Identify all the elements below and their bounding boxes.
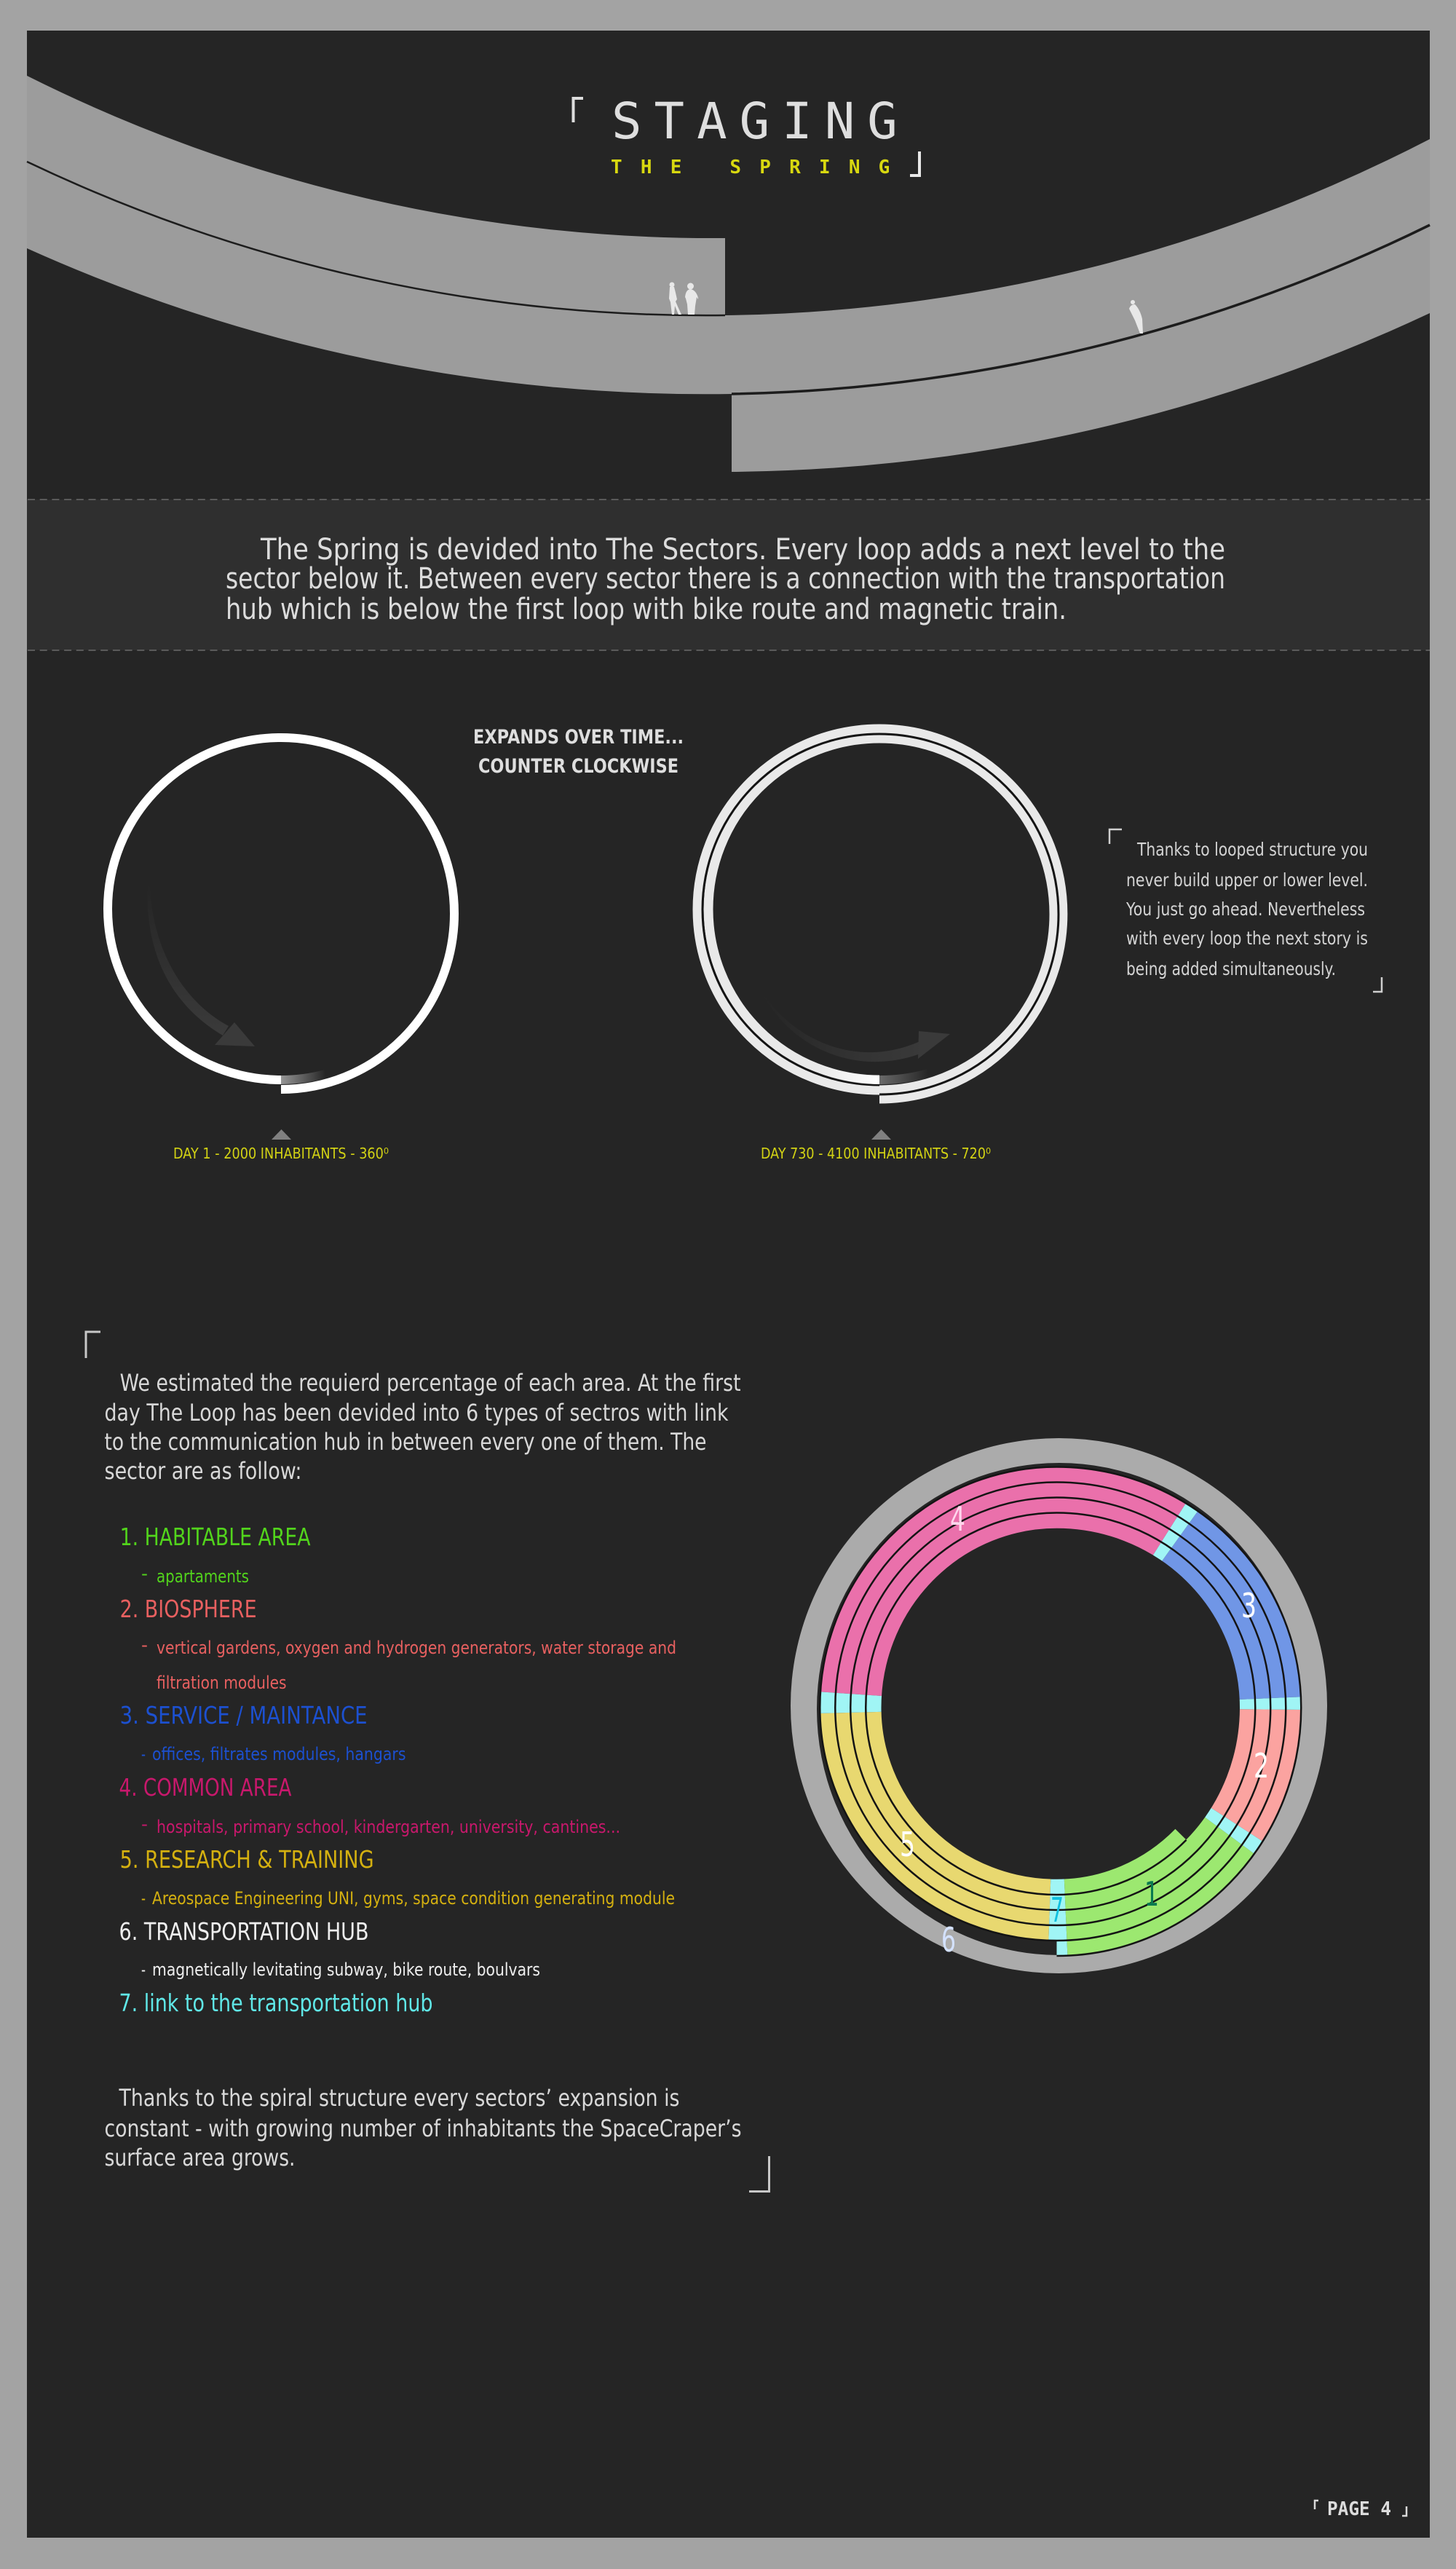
legend: biosphere: - bbox=[141, 1635, 148, 1655]
faded loop continuation bbox=[879, 1073, 928, 1080]
legend: service: - bbox=[141, 1744, 146, 1764]
legend: transportation hub: 6. TRANSPORTATION HUB bbox=[119, 1917, 368, 1946]
bracket open bbox=[1315, 2501, 1318, 2509]
expands over time heading: COUNTER CLOCKWISE bbox=[478, 755, 678, 778]
intro paragraph: day The Loop has been devided into 6 types of sectros with link bbox=[105, 1399, 729, 1426]
bracket close bbox=[749, 2156, 769, 2192]
loop separators bbox=[820, 1467, 1301, 1956]
sector description text bbox=[86, 1332, 769, 2192]
sector: common area bbox=[821, 1468, 1185, 1696]
callout text: with every loop the next story is bbox=[1126, 928, 1368, 949]
icon: walking person bbox=[1129, 300, 1143, 334]
title bracket close bbox=[910, 151, 919, 175]
number labels: 1 bbox=[1144, 1874, 1159, 1914]
legend: transportation hub: - bbox=[141, 1960, 146, 1980]
legend: habitable area bbox=[120, 1523, 311, 1587]
floor line left bbox=[27, 162, 725, 315]
legend: research and training: 5. RESEARCH & TRAINING bbox=[120, 1845, 374, 1874]
legend: service: 3. SERVICE / MAINTANCE bbox=[120, 1701, 368, 1729]
direction arrow bbox=[761, 990, 950, 1062]
upper ramp band bbox=[27, 76, 725, 315]
diagram: day 1 loop bbox=[108, 738, 454, 1089]
expands over time heading: EXPANDS OVER TIME... bbox=[473, 726, 684, 749]
marker triangle day 730 bbox=[871, 1129, 891, 1140]
legend: common area bbox=[119, 1773, 620, 1837]
spiral ramp illustration bbox=[27, 76, 1430, 472]
legend: habitable area: apartaments bbox=[157, 1566, 249, 1587]
label day 1: DAY 1 - 2000 INHABITANTS - 360⁰ bbox=[173, 1145, 389, 1162]
number labels: 5 bbox=[900, 1825, 915, 1864]
intro paragraph: We estimated the requierd percentage of each area. At the first bbox=[120, 1369, 741, 1397]
intro paragraph: sector are as follow: bbox=[105, 1457, 301, 1485]
callout text bbox=[1125, 839, 1368, 979]
marker triangle day 1 bbox=[272, 1129, 291, 1140]
diagram: day 730 loop bbox=[697, 729, 1063, 1099]
intro text bbox=[226, 533, 1225, 626]
loop highlight bbox=[818, 1068, 879, 1080]
number labels: 3 bbox=[1241, 1586, 1257, 1625]
band background bbox=[27, 500, 1430, 650]
sector: biosphere bbox=[1211, 1709, 1300, 1841]
subheading: the spring: THE SPRING bbox=[611, 157, 909, 178]
title bbox=[574, 92, 919, 178]
label day 730: DAY 730 - 4100 INHABITANTS - 720⁰ bbox=[761, 1145, 991, 1162]
lower ramp band bbox=[732, 225, 1430, 472]
legend: research and training: - bbox=[141, 1888, 146, 1909]
legend: habitable area: 1. HABITABLE AREA bbox=[120, 1523, 311, 1551]
intro text: The Spring is devided into The Sectors. Every loop adds a next level to the bbox=[260, 533, 1225, 567]
number labels: 2 bbox=[1254, 1746, 1269, 1785]
number labels: 6 bbox=[941, 1920, 956, 1960]
expands over time heading bbox=[473, 726, 684, 778]
number labels bbox=[900, 1499, 1269, 1960]
closing paragraph bbox=[105, 2084, 741, 2171]
legend: service: offices, filtrates modules, hangars bbox=[152, 1744, 406, 1764]
bracket open bbox=[86, 1332, 100, 1358]
page number bbox=[1315, 2498, 1406, 2520]
heading: staging: STAGING bbox=[612, 92, 910, 151]
legend: transportation hub: magnetically levitating subway, bike route, boulvars bbox=[152, 1960, 540, 1980]
number labels: 7 bbox=[1051, 1890, 1064, 1930]
intro paragraph: to the communication hub in between every one of them. The bbox=[105, 1428, 706, 1456]
intro paragraph bbox=[105, 1369, 741, 1485]
icon: two people bbox=[669, 283, 698, 315]
closing paragraph: surface area grows. bbox=[105, 2144, 296, 2171]
callout text: Thanks to looped structure you bbox=[1136, 839, 1368, 860]
legend: research and training: Areospace Engineering UNI, gyms, space condition generating module bbox=[152, 1888, 675, 1909]
direction arrow bbox=[148, 884, 255, 1046]
legend: biosphere: 2. BIOSPHERE bbox=[120, 1595, 257, 1623]
page label: PAGE 4 bbox=[1327, 2498, 1391, 2520]
legend: habitable area: - bbox=[141, 1563, 148, 1584]
legend: research and training bbox=[120, 1845, 675, 1909]
spiral sector diagram bbox=[791, 1438, 1327, 1973]
legend: transportation hub bbox=[119, 1917, 540, 1980]
legend: common area: - bbox=[141, 1814, 148, 1834]
separator line bbox=[703, 734, 1059, 1094]
callout text: being added simultaneously. bbox=[1126, 958, 1336, 979]
bracket close bbox=[1402, 2506, 1406, 2516]
bracket close bbox=[1373, 977, 1382, 992]
double loop ring bbox=[697, 729, 1063, 1099]
floor line right bbox=[732, 225, 1430, 394]
sector: links bbox=[828, 1475, 1294, 1949]
legend: common area: 4. COMMON AREA bbox=[119, 1773, 292, 1802]
callout text: never build upper or lower level. bbox=[1126, 869, 1368, 891]
legend: common area: hospitals, primary school, kindergarten, university, cantines... bbox=[157, 1817, 620, 1837]
bracket open bbox=[1109, 829, 1122, 844]
sector: research and training bbox=[821, 1711, 1051, 1940]
callout: looped structure bbox=[1109, 829, 1382, 992]
closing paragraph: Thanks to the spiral structure every sectors’ expansion is bbox=[119, 2084, 679, 2112]
loop ring bbox=[108, 738, 454, 1089]
title bracket open bbox=[574, 98, 583, 122]
middle ramp band bbox=[27, 139, 1430, 394]
sector: service bbox=[1162, 1512, 1300, 1700]
number labels: 4 bbox=[950, 1499, 965, 1539]
legend: biosphere: vertical gardens, oxygen and hydrogen generators, water storage and bbox=[157, 1638, 676, 1658]
intro text: hub which is below the first loop with bike route and magnetic train. bbox=[226, 593, 1067, 626]
legend: link: 7. link to the transportation hub bbox=[119, 1989, 432, 2017]
intro text: sector below it. Between every sector there is a connection with the transportation bbox=[226, 562, 1225, 596]
legend: biosphere bbox=[120, 1595, 676, 1693]
legend: biosphere: filtration modules bbox=[157, 1673, 287, 1693]
sector: habitable area bbox=[1064, 1818, 1254, 1954]
transportation hub ring bbox=[791, 1438, 1327, 1973]
faded loop continuation bbox=[281, 1074, 325, 1080]
intro band bbox=[27, 500, 1430, 650]
closing paragraph: constant - with growing number of inhabitants the SpaceCraper’s bbox=[105, 2115, 741, 2142]
legend: service bbox=[120, 1701, 406, 1764]
callout text: You just go ahead. Nevertheless bbox=[1125, 899, 1365, 920]
